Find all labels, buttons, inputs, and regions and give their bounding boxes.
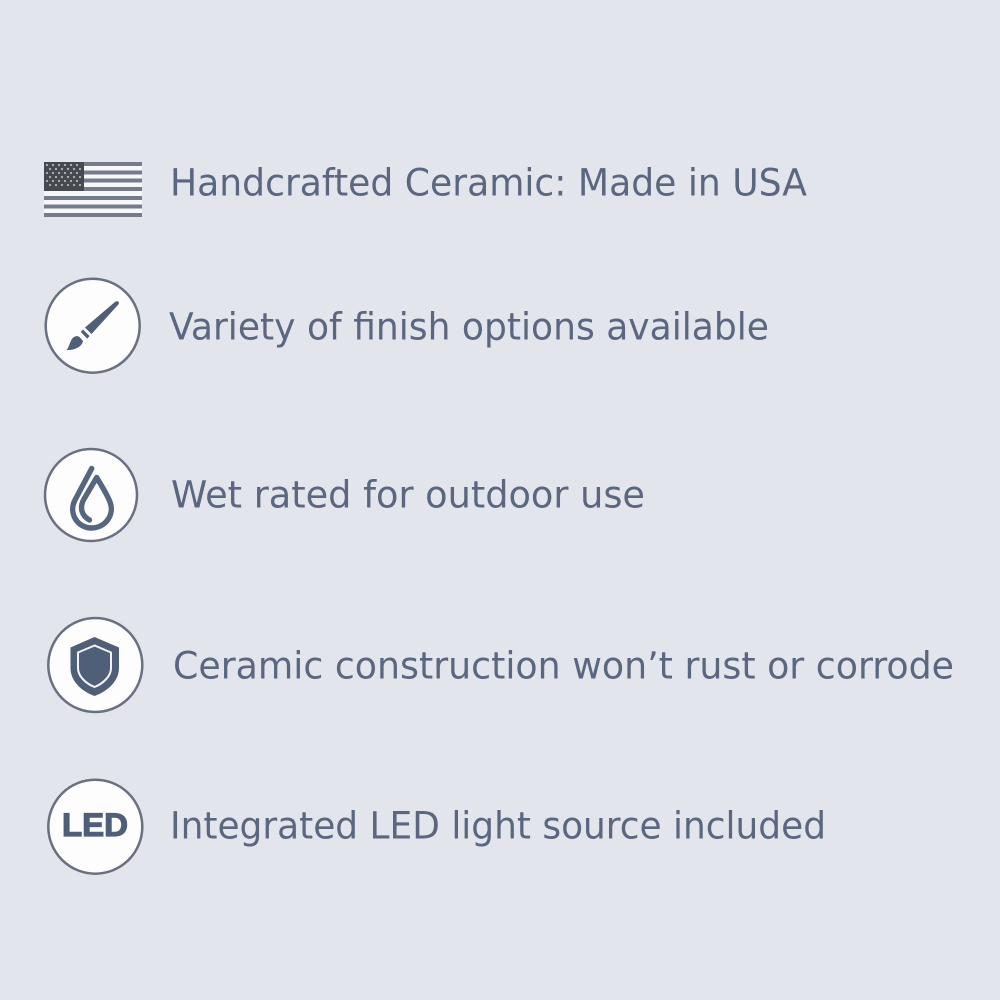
icon: LED badge: LED — [62, 807, 128, 843]
icon: water drop — [45, 449, 137, 541]
text: integrated LED: Integrated LED light source included — [170, 804, 826, 848]
icon: LED badge — [48, 780, 142, 874]
text: ceramic construction: Ceramic construction won’t rust or corrode — [173, 644, 954, 688]
text: finish options: Variety of finish options available — [169, 306, 769, 348]
icon: shield — [48, 618, 142, 712]
text: wet rated: Wet rated for outdoor use — [171, 474, 645, 516]
text: made in USA: Handcrafted Ceramic: Made in USA — [170, 162, 807, 204]
icon: paint brush — [46, 279, 140, 373]
icon: American flag — [44, 162, 142, 217]
